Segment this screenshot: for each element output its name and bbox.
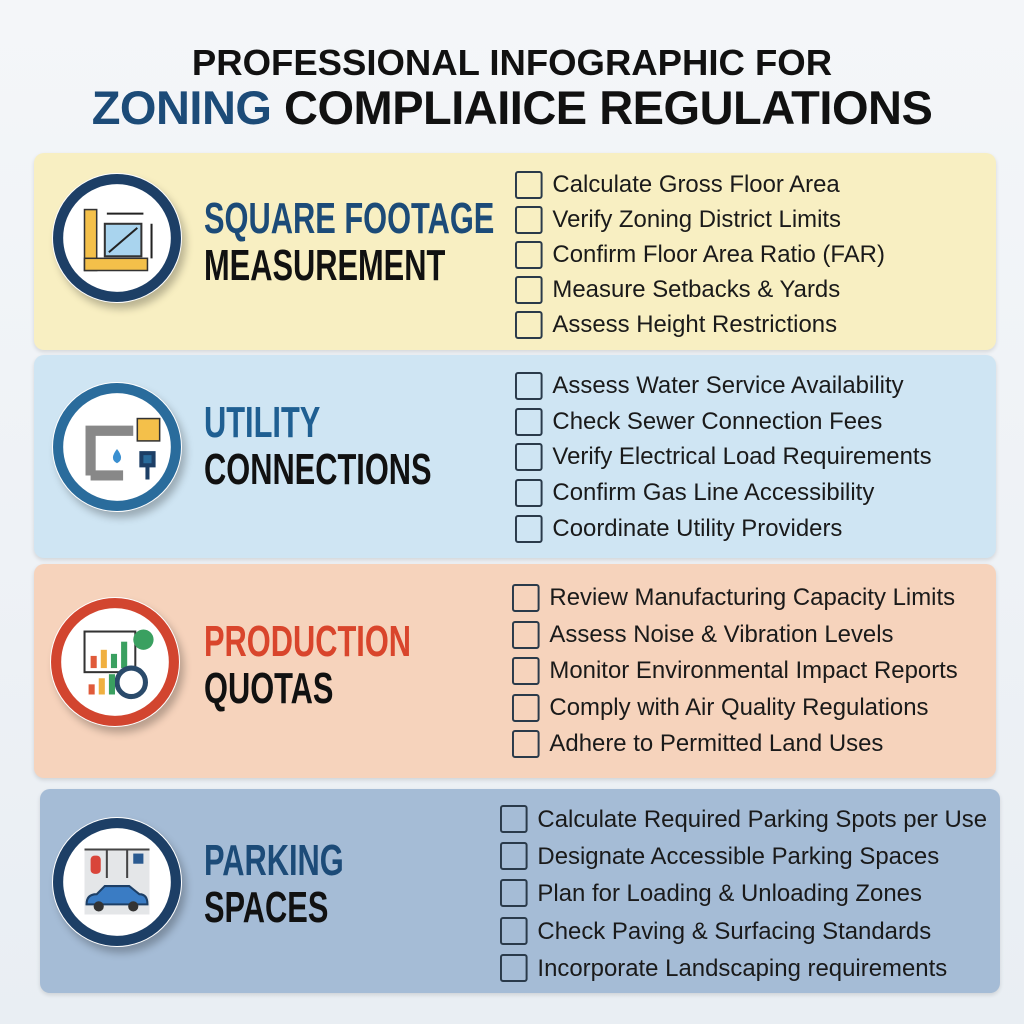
heading: MEASUREMENT xyxy=(204,241,445,290)
checklist: Designate Accessible Parking Spaces xyxy=(537,843,939,870)
heading: PARKING xyxy=(204,836,344,885)
panel: parking spaces xyxy=(40,789,1000,993)
checklist: Coordinate Utility Providers xyxy=(552,515,842,542)
checklist: Check Paving & Surfacing Standards xyxy=(537,918,931,945)
title line 1: PROFESSIONAL INFOGRAPHIC FOR xyxy=(192,42,832,83)
title xyxy=(92,42,932,134)
checklist: Confirm Floor Area Ratio (FAR) xyxy=(552,241,885,268)
heading xyxy=(204,836,344,932)
checklist: Calculate Required Parking Spots per Use xyxy=(537,806,987,833)
checklist: Confirm Gas Line Accessibility xyxy=(552,479,874,506)
icon: charts and gear xyxy=(50,597,180,727)
panel: utility connections xyxy=(34,355,996,558)
checklist: Assess Water Service Availability xyxy=(552,372,904,399)
panel: square footage xyxy=(34,153,996,350)
heading xyxy=(204,194,494,290)
checklist: Incorporate Landscaping requirements xyxy=(537,955,947,982)
checklist: Comply with Air Quality Regulations xyxy=(549,694,929,720)
checklist xyxy=(500,805,987,982)
checklist: Monitor Environmental Impact Reports xyxy=(549,657,958,684)
checklist: Assess Noise & Vibration Levels xyxy=(549,620,894,648)
heading: SQUARE FOOTAGE xyxy=(204,194,494,243)
title line 2: ZONING COMPLIAIICE REGULATIONS xyxy=(92,81,932,134)
icon: parking lot xyxy=(52,817,182,947)
checklist xyxy=(512,584,958,758)
checklist: Calculate Gross Floor Area xyxy=(552,171,840,198)
heading: SPACES xyxy=(204,883,328,932)
panel: production quotas xyxy=(34,564,996,778)
heading xyxy=(204,398,432,494)
checklist: Assess Height Restrictions xyxy=(552,311,837,338)
checklist xyxy=(515,171,885,339)
heading xyxy=(204,617,411,713)
checklist: Adhere to Permitted Land Uses xyxy=(549,730,883,757)
checklist: Plan for Loading & Unloading Zones xyxy=(537,880,922,907)
checklist: Verify Electrical Load Requirements xyxy=(552,443,932,470)
checklist xyxy=(515,372,932,543)
icon: pipes and plug xyxy=(52,382,182,512)
icon: ruler square xyxy=(52,173,182,303)
checklist: Measure Setbacks & Yards xyxy=(552,276,840,303)
checklist: Check Sewer Connection Fees xyxy=(552,408,882,435)
heading: CONNECTIONS xyxy=(204,445,432,494)
heading: UTILITY xyxy=(204,398,320,447)
heading: PRODUCTION xyxy=(204,617,411,666)
checklist: Verify Zoning District Limits xyxy=(552,206,841,233)
checklist: Review Manufacturing Capacity Limits xyxy=(549,584,955,611)
heading: QUOTAS xyxy=(204,664,333,713)
